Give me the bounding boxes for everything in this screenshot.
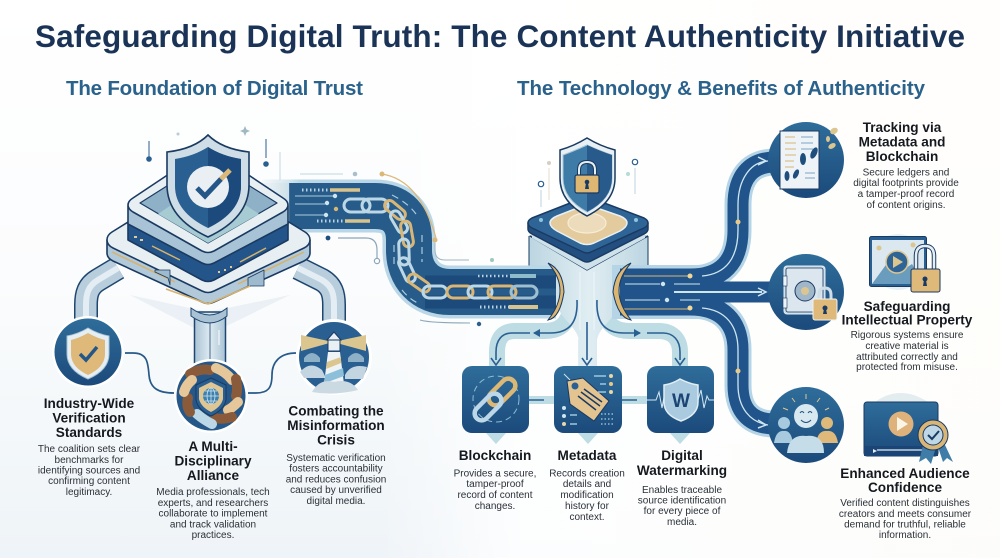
block: A Multi-Disciplinary Alliance	[156, 439, 270, 541]
block: A Multi-Disciplinary Alliance: Media professionals, tech	[156, 487, 270, 498]
block: Combating the Misinformation Crisis: fosters accountability	[289, 464, 383, 474]
block: Safeguarding Intellectual Property: creative material is	[865, 341, 949, 352]
circuit accents	[300, 172, 494, 326]
block: Tracking via Metadata and Blockchain	[853, 120, 959, 211]
block: Combating the Misinformation Crisis: Systematic verification	[286, 453, 386, 464]
block: Tracking via Metadata and Blockchain: Blockchain	[866, 149, 938, 164]
block: Combating the Misinformation Crisis: and reduces confusion	[286, 474, 386, 486]
block: Enhanced Audience Confidence: creators and meets consumer	[839, 509, 972, 520]
block: Digital Watermarking: Digital	[661, 448, 703, 463]
branch fills	[620, 162, 775, 424]
block: Combating the Misinformation Crisis: digital media.	[307, 496, 365, 507]
block: Digital Watermarking: source identification	[638, 496, 726, 506]
lower plate	[107, 174, 310, 304]
block: Enhanced Audience Confidence: information.	[879, 530, 931, 541]
block: Tracking via Metadata and Blockchain: a tamper-proof record	[858, 189, 954, 200]
icon tile: digital watermarking	[646, 366, 714, 444]
block: Blockchain: tamper-proof	[466, 479, 524, 490]
pale distribution pipes	[497, 262, 680, 400]
block: Combating the Misinformation Crisis: caused by unverified	[290, 485, 382, 496]
icon: video frame with padlock	[870, 234, 940, 292]
block: A Multi-Disciplinary Alliance: and track validation	[170, 520, 256, 530]
pipes under platform	[86, 268, 334, 367]
block: Blockchain: Blockchain	[459, 448, 531, 463]
block: A Multi-Disciplinary Alliance: collaborate to implement	[159, 508, 268, 520]
icon circle: safe with padlock	[768, 254, 844, 330]
block: Safeguarding Intellectual Property: Intellectual Property	[842, 312, 973, 328]
block: Digital Watermarking: media.	[667, 517, 697, 528]
chain links	[344, 198, 537, 298]
sparkles and pins	[146, 126, 280, 180]
block: A Multi-Disciplinary Alliance: Alliance	[187, 468, 240, 483]
block: Tracking via Metadata and Blockchain: digital footprints provide	[853, 178, 959, 189]
icon: hub shield with padlock	[560, 138, 615, 216]
icon: main shield with check	[167, 135, 249, 237]
block: A Multi-Disciplinary Alliance: Disciplinary	[174, 454, 252, 468]
block: A Multi-Disciplinary Alliance: A Multi-	[188, 439, 238, 454]
block: Industry-Wide Verification Standards: Verification	[52, 410, 126, 426]
icon circle: verification shield	[52, 316, 124, 388]
icon tile: digital watermarking: W	[672, 391, 690, 412]
icon circle: alliance hands	[174, 359, 248, 433]
block: Tracking via Metadata and Blockchain: Tracking via	[863, 120, 942, 135]
branch outlines	[620, 162, 775, 424]
block: Industry-Wide Verification Standards: Industry-Wide	[44, 396, 135, 411]
block: Safeguarding Intellectual Property: attributed correctly and	[856, 352, 958, 363]
hub pins	[538, 159, 638, 207]
block: A Multi-Disciplinary Alliance: experts, and researchers	[158, 498, 268, 509]
block: Industry-Wide Verification Standards: The coalition sets clear	[38, 444, 141, 455]
block: Safeguarding Intellectual Property: Rigorous systems ensure	[851, 330, 964, 341]
block: Blockchain: Provides a secure,	[454, 468, 536, 480]
block: Blockchain	[454, 448, 536, 512]
tower column	[529, 235, 648, 366]
block: Tracking via Metadata and Blockchain: of content origins.	[867, 200, 945, 211]
block: Industry-Wide Verification Standards	[38, 396, 141, 498]
block: Combating the Misinformation Crisis	[286, 404, 386, 507]
block: Metadata: context.	[569, 512, 605, 523]
block: Industry-Wide Verification Standards: benchmarks for	[55, 455, 124, 466]
block: Blockchain: record of content	[457, 490, 533, 501]
icon tile: blockchain	[462, 366, 529, 444]
block: Metadata: details and	[563, 479, 611, 490]
block: Combating the Misinformation Crisis: Crisis	[317, 432, 355, 448]
upper box	[128, 150, 288, 282]
platform base shadow	[130, 295, 290, 335]
block: Safeguarding Intellectual Property: Safeguarding	[864, 299, 950, 314]
connector: middle to right	[248, 353, 296, 393]
block: Enhanced Audience Confidence	[839, 466, 972, 541]
block: Enhanced Audience Confidence: demand for truthful, reliable	[844, 520, 966, 530]
block: Metadata: modification	[560, 490, 614, 501]
arrows to tiles	[491, 300, 685, 365]
panel: left data ribbon with chain	[262, 172, 556, 326]
block: Digital Watermarking	[637, 448, 727, 528]
gold flanges	[548, 263, 631, 320]
block: Blockchain: changes.	[475, 501, 515, 512]
block: Industry-Wide Verification Standards: confirming content	[48, 476, 130, 487]
title: Safeguarding Digital Truth: The Content Authenticity Initiative	[35, 18, 965, 54]
block: Safeguarding Intellectual Property: protected from misuse.	[856, 362, 958, 373]
block: A Multi-Disciplinary Alliance: practices.	[192, 530, 234, 541]
icon circle: tracking document	[768, 122, 844, 198]
block: Tracking via Metadata and Blockchain: Secure ledgers and	[863, 168, 949, 178]
block: Tracking via Metadata and Blockchain: Metadata and	[859, 134, 945, 150]
block: Enhanced Audience Confidence: Enhanced Audience	[840, 466, 970, 481]
block: Enhanced Audience Confidence: Confidence	[868, 480, 942, 495]
block: Enhanced Audience Confidence: Verified content distinguishes	[840, 498, 970, 509]
icon: video with verified badge	[864, 393, 953, 464]
block: Combating the Misinformation Crisis: Misinformation	[287, 418, 385, 433]
block: Industry-Wide Verification Standards: legitimacy.	[66, 487, 112, 498]
block: Industry-Wide Verification Standards: identifying sources and	[38, 466, 140, 476]
ribbon data ticks	[295, 190, 538, 307]
panel: right ribbon branches	[612, 157, 775, 428]
branch arrowheads	[758, 157, 766, 428]
panel: central hub	[491, 138, 685, 400]
heading: technology and benefits: The Technology & Benefits of Authenticity	[517, 77, 926, 100]
hub platform	[528, 197, 648, 262]
block: Metadata: history for	[565, 501, 610, 512]
heading: foundation: The Foundation of Digital Trust	[66, 77, 363, 100]
block: Metadata: Records creation	[549, 468, 625, 480]
icon circle: audience	[768, 387, 844, 463]
block: Combating the Misinformation Crisis: Combating the	[288, 404, 384, 418]
icon tile: metadata	[554, 366, 622, 444]
branch lines	[624, 161, 768, 425]
block: Industry-Wide Verification Standards: Standards	[56, 425, 122, 440]
block: Digital Watermarking: Watermarking	[637, 463, 727, 478]
block: Digital Watermarking: for every piece of	[644, 506, 721, 517]
block: Safeguarding Intellectual Property	[842, 299, 973, 373]
block: Digital Watermarking: Enables traceable	[642, 485, 722, 496]
block: Metadata: Metadata	[558, 448, 617, 463]
connector: left to middle	[125, 353, 174, 393]
icon circle: lighthouse	[296, 319, 372, 395]
panel: foundation illustration	[86, 126, 334, 367]
block: Metadata	[549, 448, 625, 523]
